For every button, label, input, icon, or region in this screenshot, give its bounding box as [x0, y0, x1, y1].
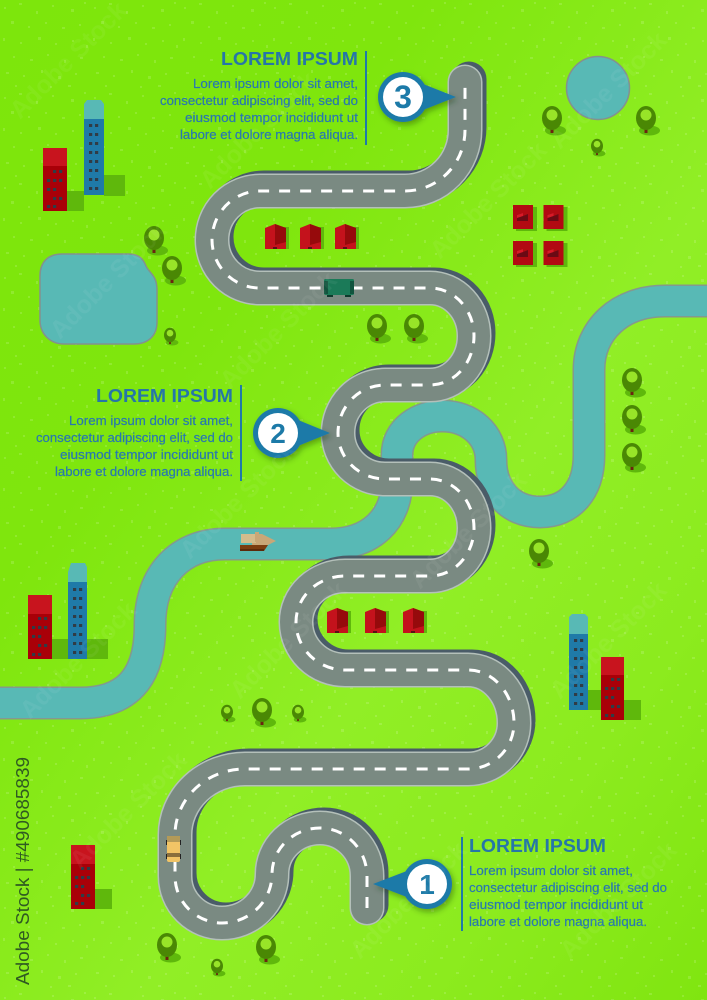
- trees: [144, 106, 660, 976]
- text block 3: eiusmod tempor incididunt ut: [185, 111, 359, 125]
- text block 1: LOREM IPSUM: [469, 836, 606, 856]
- text block 1: [461, 836, 667, 931]
- watermarks: Adobe Stock: [404, 466, 532, 594]
- text block 2: LOREM IPSUM: [96, 386, 233, 406]
- watermarks: Adobe Stock: [174, 436, 302, 564]
- building group: right: [569, 614, 641, 720]
- watermarks: Adobe Stock: [554, 836, 682, 964]
- text block 1: consectetur adipiscing elit, sed do: [469, 881, 667, 895]
- watermarks: Adobe Stock: [344, 836, 472, 964]
- building group: top left: [43, 100, 125, 211]
- callout 1: [373, 859, 452, 909]
- watermarks: Adobe Stock: [214, 266, 342, 394]
- text block 2: [36, 385, 242, 481]
- text block 3: LOREM IPSUM: [221, 49, 358, 69]
- text block 1: labore et dolore magna aliqua.: [469, 915, 647, 929]
- building group: middle left: [28, 563, 108, 659]
- text block 2: eiusmod tempor incididunt ut: [60, 448, 234, 462]
- car: taxi: [166, 836, 181, 862]
- houses: upper row: [265, 224, 359, 249]
- houses: middle row: [327, 608, 427, 633]
- lake: left: [40, 254, 157, 344]
- text block 3: consectetur adipiscing elit, sed do: [160, 94, 358, 108]
- text block 1: Lorem ipsum dolor sit amet,: [469, 864, 633, 878]
- lake: round: [566, 56, 630, 120]
- car: green: [324, 279, 354, 297]
- watermarks: Adobe Stock: [4, 0, 132, 124]
- text block 2: consectetur adipiscing elit, sed do: [36, 431, 233, 445]
- callout 3: [378, 72, 456, 122]
- callout 2: 2: [270, 418, 286, 449]
- watermarks: Adobe Stock: [14, 596, 142, 724]
- vertical stock id: Adobe Stock | #490685839: [13, 757, 33, 985]
- boat: [240, 532, 276, 551]
- building: bottom left: [71, 845, 112, 909]
- river: [0, 301, 707, 703]
- watermarks: Adobe Stock: [424, 136, 552, 264]
- text block 2: labore et dolore magna aliqua.: [55, 465, 233, 479]
- watermarks: Adobe Stock: [64, 746, 192, 874]
- text block 1: eiusmod tempor incididunt ut: [469, 898, 644, 912]
- houses: top right block: [513, 205, 568, 267]
- watermarks: Adobe Stock: [544, 576, 672, 704]
- text block 3: Lorem ipsum dolor sit amet,: [193, 77, 358, 91]
- callout 2: [253, 408, 330, 458]
- text block 3: labore et dolore magna aliqua.: [180, 128, 358, 142]
- text block 3: [160, 49, 367, 145]
- watermarks: Adobe Stock: [544, 26, 672, 154]
- callout 3: 3: [394, 79, 412, 115]
- road: [175, 79, 518, 923]
- watermarks: Adobe Stock: [44, 216, 172, 344]
- text block 2: Lorem ipsum dolor sit amet,: [69, 414, 233, 428]
- callout 1: 1: [419, 869, 435, 900]
- watermarks: Adobe Stock: [224, 576, 352, 704]
- watermarks: Adobe Stock: [194, 66, 322, 194]
